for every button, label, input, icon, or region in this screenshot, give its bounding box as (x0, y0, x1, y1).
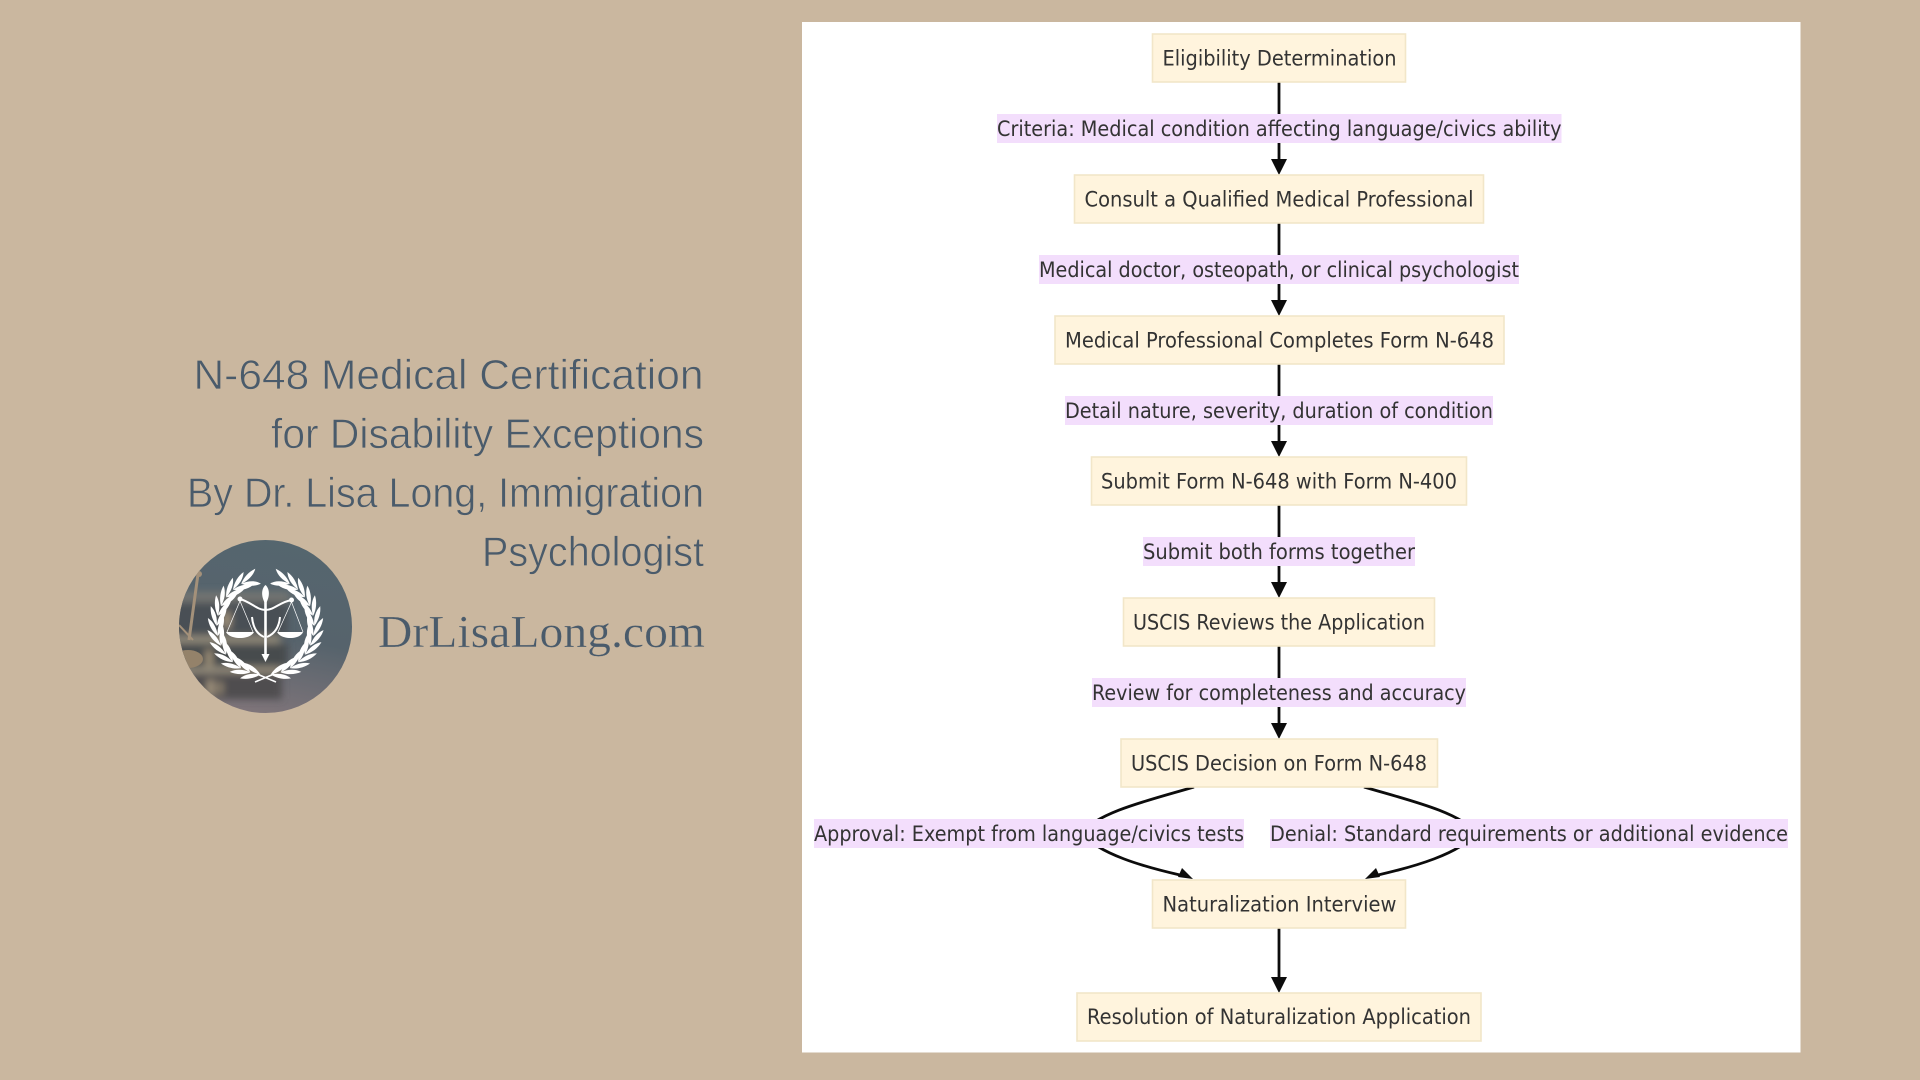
node: USCIS Reviews the Application: USCIS Reviews the Application (1133, 610, 1425, 636)
node: Medical Professional Completes Form N-648: Medical Professional Completes Form N-648 (1065, 328, 1494, 354)
node: Medical Professional Completes Form N-648 (1055, 316, 1504, 364)
node: USCIS Decision on Form N-648 (1121, 739, 1438, 787)
edge label: review: Review for completeness and accuracy (1092, 681, 1466, 706)
edge label: criteria: Criteria: Medical condition affecting language/civics ability (997, 117, 1562, 142)
scales icon (226, 585, 303, 662)
arrow: Eligibility to Consult (1271, 82, 1287, 175)
node: Naturalization Interview: Naturalization Interview (1162, 892, 1396, 918)
arrow: Consult to Medical Professional (1271, 223, 1287, 316)
title: for Disability Exceptions (271, 410, 704, 457)
node: Naturalization Interview (1152, 880, 1406, 928)
edge label: denial: Denial: Standard requirements or additional evidence (1270, 822, 1788, 847)
arrow: Submit to USCIS Review (1271, 505, 1287, 598)
node: Eligibility Determination: Eligibility Determination (1162, 46, 1396, 72)
title (187, 351, 704, 575)
title: Psychologist (482, 528, 704, 575)
edge label: submit both: Submit both forms together (1143, 540, 1415, 565)
edge label: professionals: Medical doctor, osteopath, or clinical psychologist (1039, 258, 1519, 283)
node: USCIS Decision on Form N-648: USCIS Decision on Form N-648 (1131, 752, 1427, 776)
arrow: Interview to Resolution (1271, 928, 1287, 993)
title: By Dr. Lisa Long, Immigration (187, 469, 704, 516)
node: Submit Form N-648 with Form N-400 (1092, 457, 1466, 505)
title: N-648 Medical Certification (194, 351, 704, 398)
logo: scales of justice in laurel wreath (179, 540, 352, 713)
panel: flowchart (802, 22, 1800, 1052)
laurel wreath (207, 569, 324, 682)
arrow: Medical Professional to Submit (1271, 364, 1287, 457)
arrow: Decision denial path to Interview (1364, 787, 1476, 879)
website name: DrLisaLong.com (378, 606, 705, 657)
node: Submit Form N-648 with Form N-400: Submit Form N-648 with Form N-400 (1101, 470, 1457, 494)
edge label: approval: Approval: Exempt from language/civics tests (814, 822, 1244, 847)
node: Eligibility Determination (1152, 34, 1406, 82)
node: Resolution of Naturalization Application: Resolution of Naturalization Application (1087, 1005, 1471, 1030)
arrow: Review to Decision (1271, 646, 1287, 739)
node: Consult a Qualified Medical Professional: Consult a Qualified Medical Professional (1084, 188, 1474, 212)
node: USCIS Reviews the Application (1124, 598, 1434, 646)
edge label: detail: Detail nature, severity, duration of condition (1065, 399, 1493, 424)
node: Resolution of Naturalization Application (1077, 993, 1481, 1041)
node: Consult a Qualified Medical Professional (1074, 175, 1484, 223)
arrow: Decision approval path to Interview (1082, 787, 1194, 879)
